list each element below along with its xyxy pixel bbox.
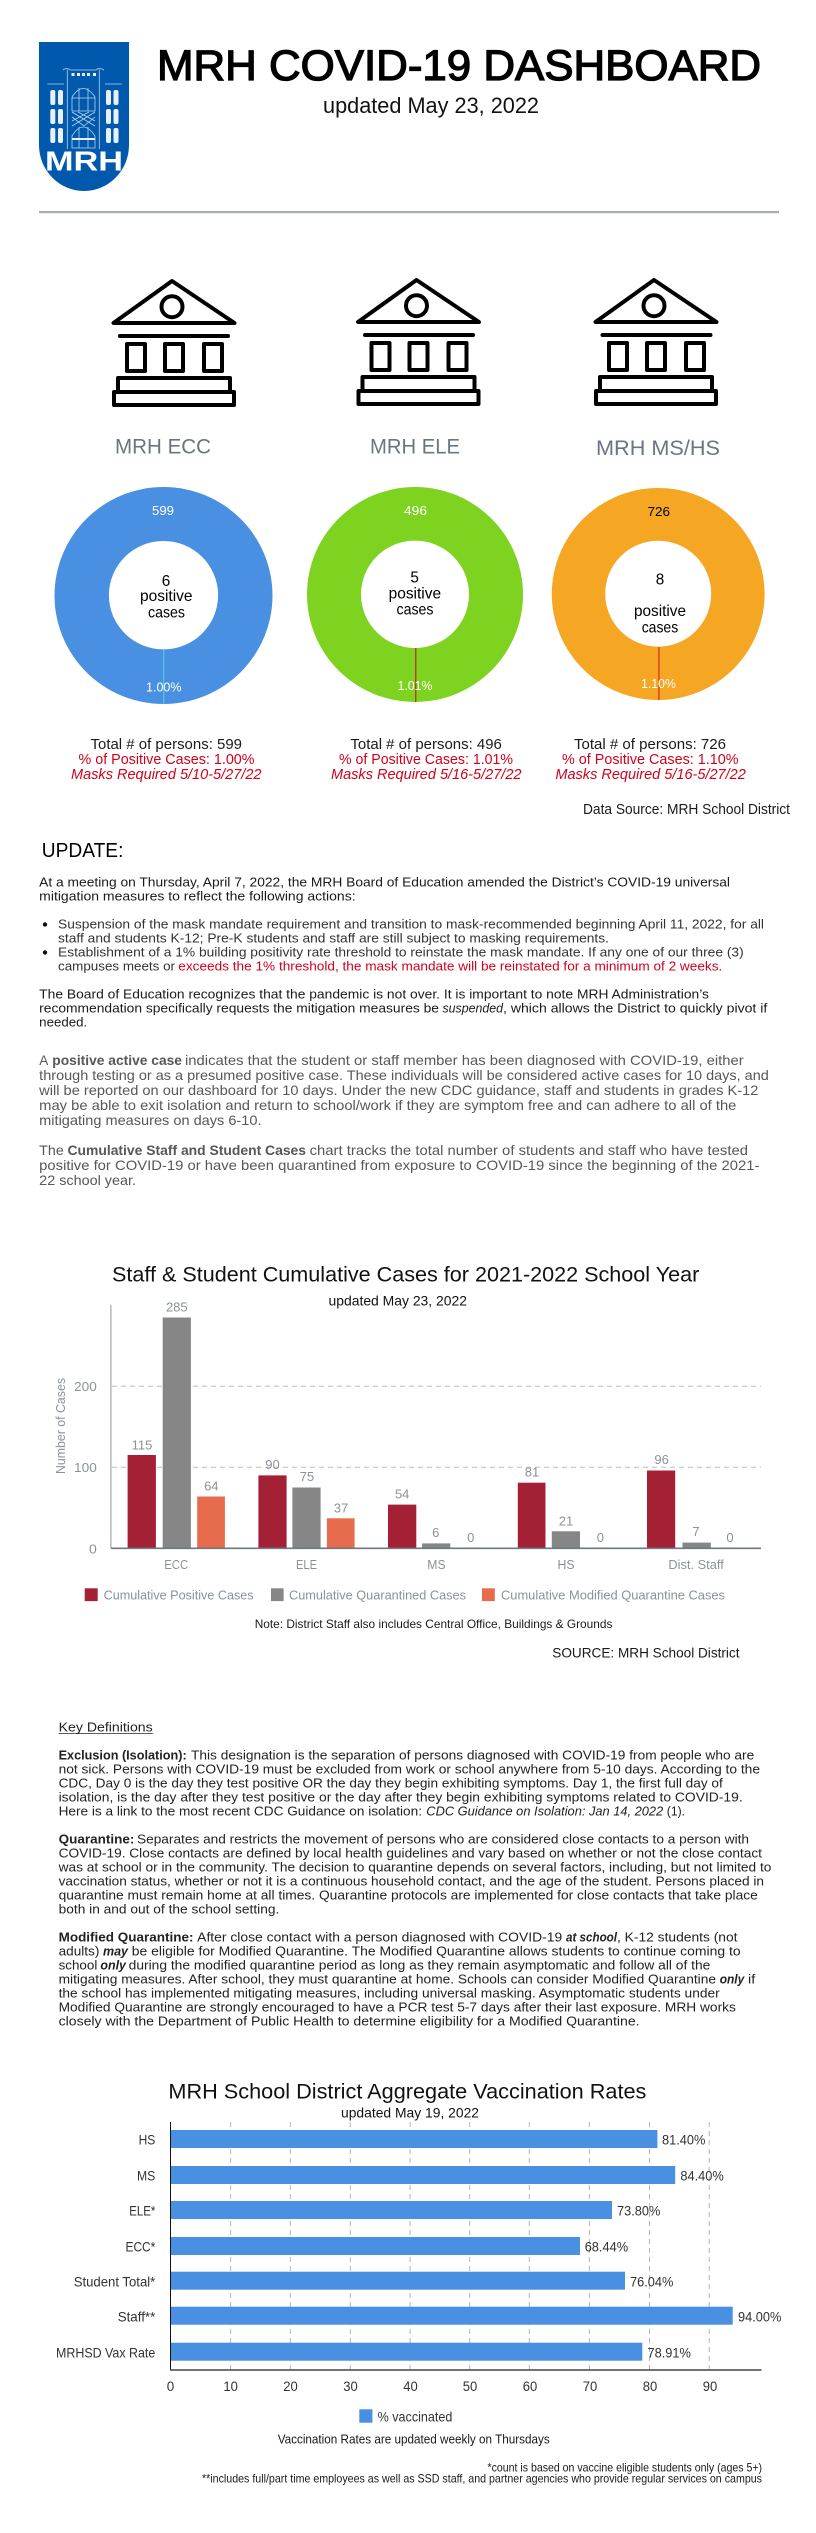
text block: positive active case: may be able to exit isolation and return to school/work if they are symptom free and can adhere to all of the (39, 1097, 737, 1113)
value labels (585, 2132, 781, 2361)
header (39, 42, 761, 191)
chart title: MRH School District Aggregate Vaccination Rates (168, 2080, 646, 2103)
x axis labels: 40 (403, 2378, 418, 2394)
icon: school building MS/HS (596, 280, 716, 404)
title: MRH COVID-19 DASHBOARD (157, 42, 761, 90)
donut chart: MS/HS: 1.10% (641, 676, 676, 691)
definition: modified quarantine (59, 1930, 756, 2029)
bar value labels: 7 (692, 1524, 700, 1539)
definition: modified quarantine: , K-12 students (not (617, 1930, 738, 1945)
subtitle date: updated May 23, 2022 (323, 93, 539, 118)
stats: ELE (331, 736, 522, 783)
source: SOURCE: MRH School District (552, 1645, 740, 1661)
y axis labels: 0 (89, 1542, 97, 1557)
definition: modified quarantine: closely with the Department of Public Health to determine eligibility for a Modified Quarantine. (59, 2014, 640, 2029)
x axis labels: 70 (583, 2378, 597, 2394)
bar value labels: 96 (654, 1452, 669, 1467)
bar value labels: 0 (597, 1530, 604, 1545)
heading: key definitions: Key Definitions (59, 1720, 153, 1735)
definition: modified quarantine: at school (566, 1930, 617, 1945)
text block: positive active case (38, 1052, 769, 1128)
donut chart: ECC: positive (140, 588, 193, 605)
definition: exclusion: isolation, is the day after they test positive or the day after they begin exhibiting symptoms related to COVID-19. (59, 1790, 743, 1805)
definition: exclusion (59, 1747, 760, 1819)
category labels: MS (137, 2168, 155, 2184)
x axis labels: 60 (523, 2378, 537, 2394)
definition: quarantine: both in and out of the school setting. (59, 1902, 279, 1917)
x axis labels: 10 (223, 2378, 238, 2394)
list: mitigation actions: staff and students K-12; Pre-K students and staff are still subject to masking requirements. (58, 931, 609, 946)
text block: cumulative cases explanation: chart tracks the total number of students and staff who have tested (310, 1142, 748, 1158)
text block: board meeting intro: At a meeting on Thursday, April 7, 2022, the MRH Board of Education amended the District’s COVID-19 universal (39, 875, 730, 890)
bar value labels: 64 (204, 1478, 219, 1493)
footnotes (202, 2461, 762, 2486)
list: mitigation actions: campuses meets or (58, 959, 176, 974)
donut chart: ELE: 1.01% (398, 678, 433, 693)
value labels: 94.00% (738, 2309, 781, 2325)
bar value labels: 0 (726, 1530, 734, 1545)
definition: modified quarantine: be eligible for Modified Quarantine. The Modified Quarantine allows students to continue coming to (132, 1944, 741, 1959)
definition: modified quarantine: mitigating measures. After school, they must quarantine at home. Schools can consider Modified Quarantine (59, 1972, 716, 1987)
bar chart: vaccination rates (56, 2080, 781, 2486)
definition: exclusion: (1). (667, 1804, 685, 1819)
legend (85, 1588, 725, 1603)
chart date: updated May 23, 2022 (328, 1293, 467, 1309)
panel: MRH ECC (54, 281, 272, 783)
stats: ECC: Total # of persons: 599 (90, 736, 242, 753)
bar value labels: 285 (166, 1299, 188, 1314)
donut chart: ELE: 496 (404, 503, 427, 518)
list: mitigation actions (43, 917, 764, 974)
label: MRH MS/HS: MRH MS/HS (596, 437, 720, 460)
bar value labels: 115 (132, 1437, 152, 1452)
value labels: 81.40% (662, 2132, 705, 2148)
definition: quarantine: vaccination status, whether or not it is a continuous household contact, and the age of the student. Persons placed in (59, 1874, 764, 1889)
definition: modified quarantine: only (720, 1972, 745, 1987)
definition: quarantine: Quarantine: (59, 1832, 134, 1847)
legend: % vaccinated (378, 2409, 452, 2425)
x axis labels: ELE (296, 1557, 317, 1572)
definition: modified quarantine: if (748, 1972, 756, 1987)
stats: MS/HS: Masks Required 5/16-5/27/22 (555, 766, 746, 783)
definition: modified quarantine: Modified Quarantine are strongly encouraged to have a PCR test 5-7 days after their last exposure. MRH works (59, 2000, 736, 2015)
text block: pandemic not over: The Board of Education recognizes that the pandemic is not over. It is important to note MRH Administration’s (39, 987, 710, 1002)
definition: quarantine: COVID-19. Close contacts are defined by local health guidelines and vary based on whether or not the close contact (59, 1846, 762, 1861)
donut chart: ELE: 5 (410, 570, 419, 587)
donut chart: ECC: 1.00% (146, 680, 182, 695)
x axis labels: 20 (283, 2378, 298, 2394)
definition: exclusion: not sick. Persons with COVID-19 must be excluded from work or school anywhere from 5-10 days. According to the (59, 1761, 760, 1776)
note: update schedule: Vaccination Rates are updated weekly on Thursdays (278, 2432, 550, 2447)
text block: cumulative cases explanation (39, 1142, 760, 1188)
text block: positive active case: indicates that the student or staff member has been diagnosed with COVID-19, either (185, 1052, 744, 1068)
heading: update: UPDATE: (42, 840, 123, 862)
bar value labels: 37 (334, 1500, 348, 1515)
x axis labels (164, 1557, 724, 1572)
stats: ECC: % of Positive Cases: 1.00% (78, 751, 254, 768)
text block: cumulative cases explanation: The (39, 1142, 64, 1158)
category labels: ELE* (129, 2203, 156, 2219)
text block: positive active case: positive active case (52, 1052, 182, 1068)
x axis labels: HS (558, 1557, 575, 1572)
stats: ECC: Masks Required 5/10-5/27/22 (71, 766, 262, 783)
donut chart: ECC (54, 487, 272, 704)
stats: ELE: Total # of persons: 496 (350, 736, 502, 753)
text block: cumulative cases explanation: positive for COVID-19 or have been quarantined from exposure to COVID-19 since the beginning of the 2021- (39, 1157, 760, 1173)
legend: Cumulative Modified Quarantine Cases (501, 1588, 725, 1603)
donut chart: MS/HS: positive (634, 603, 686, 620)
category labels: Student Total* (74, 2274, 156, 2290)
bars: MS (388, 1505, 450, 1548)
definition: exclusion: This designation is the separation of persons diagnosed with COVID-19 from people who are (191, 1747, 754, 1762)
donut chart: MS/HS: cases (642, 620, 678, 637)
category labels: Staff** (118, 2309, 156, 2325)
text block: board meeting intro: mitigation measures to reflect the following actions: (39, 889, 356, 904)
data source note: Data Source: MRH School District (583, 801, 791, 818)
value labels: 68.44% (585, 2239, 628, 2255)
x axis labels: MS (427, 1557, 446, 1572)
x axis labels: 50 (463, 2378, 477, 2394)
definition: exclusion: CDC, Day 0 is the day they test positive OR the day they begin exhibiting symptoms. Day 1, the first full day of (59, 1776, 723, 1790)
list: mitigation actions: Establishment of a 1% building positivity rate threshold to reinstate the mask mandate. If any one of our three (3) (58, 945, 744, 960)
value labels: 76.04% (630, 2274, 673, 2290)
text block: cumulative cases explanation: Cumulative Staff and Student Cases (68, 1142, 306, 1158)
logo: MRH shield: MRH (45, 146, 123, 177)
list: mitigation actions: exceeds the 1% threshold, the mask mandate will be reinstated for a minimum of 2 weeks. (178, 959, 722, 974)
y axis labels: 100 (74, 1460, 97, 1475)
icon: school building ECC (114, 281, 234, 405)
bars: ECC (128, 1318, 225, 1548)
update section (38, 840, 769, 1188)
bars: ELE (258, 1475, 355, 1548)
category labels: HS (139, 2132, 155, 2148)
x axis labels: ECC (164, 1557, 188, 1572)
x axis labels: 80 (643, 2378, 657, 2394)
x axis labels: Dist. Staff (668, 1557, 724, 1572)
bar value labels: 90 (265, 1457, 280, 1472)
footnotes: **includes full/part time employees as well as SSD staff, and partner agencies who provide regular services on campus (202, 2472, 762, 2486)
donut chart: ELE (307, 487, 523, 702)
bar value labels: 54 (395, 1486, 409, 1501)
chart title: Staff & Student Cumulative Cases for 2021-2022 School Year (112, 1264, 699, 1287)
bar value labels: 21 (559, 1513, 573, 1528)
logo: MRH shield (39, 42, 129, 191)
text block: positive active case: mitigating measures on days 6-10. (39, 1112, 262, 1128)
definition: modified quarantine: school (59, 1958, 97, 1973)
definition: exclusion: Here is a link to the most recent CDC Guidance on isolation: (59, 1804, 422, 1819)
chart date: updated May 19, 2022 (341, 2105, 479, 2121)
x axis labels: 30 (343, 2378, 358, 2394)
text block: pandemic not over: suspended (442, 1001, 504, 1016)
stats: ELE: % of Positive Cases: 1.01% (339, 751, 513, 768)
text block: cumulative cases explanation: 22 school year. (39, 1172, 136, 1188)
donut chart: ELE: positive (389, 585, 441, 602)
stats: MS/HS: % of Positive Cases: 1.10% (562, 751, 738, 768)
definition: modified quarantine: during the modified quarantine period as long as they remain asymptomatic and follow all of the (129, 1958, 710, 1973)
bar value labels: 81 (525, 1464, 539, 1479)
stats: ELE: Masks Required 5/16-5/27/22 (331, 766, 522, 783)
bar value labels: 75 (300, 1469, 314, 1484)
stats: MS/HS (555, 736, 746, 783)
text block: positive active case: A (39, 1052, 49, 1068)
text block: positive active case: will be reported on our dashboard for 10 days. Under the new CDC guidance, staff and students in grades K-12 (38, 1082, 759, 1098)
category labels (56, 2132, 156, 2361)
definition: modified quarantine: the school has implemented mitigating measures, including universal masking. Asymptomatic students under (59, 1986, 720, 2001)
definition: modified quarantine: only (100, 1958, 127, 1973)
category labels: MRHSD Vax Rate (56, 2345, 155, 2361)
donut chart: MS/HS: 726 (648, 504, 670, 519)
value labels: 73.80% (617, 2203, 660, 2219)
legend: Cumulative Positive Cases (104, 1588, 254, 1603)
bars: % vaccinated (170, 2130, 733, 2361)
legend: Cumulative Quarantined Cases (289, 1588, 466, 1603)
key definitions (58, 1720, 771, 2029)
definition: modified quarantine: may (103, 1944, 129, 1959)
icon: school building ELE (358, 280, 479, 404)
bar chart: cumulative cases (53, 1264, 761, 1661)
panel: MRH MS/HS (552, 280, 765, 783)
bars: HS (518, 1483, 580, 1548)
definition: quarantine: was at school or in the community. The decision to quarantine depends on several factors, including, but not limited to (58, 1860, 771, 1875)
donut chart: ECC: 6 (162, 573, 170, 590)
donut chart: MS/HS (552, 488, 765, 700)
definition: modified quarantine: adults) (59, 1944, 99, 1959)
donut chart: MS/HS: 8 (656, 572, 664, 589)
list: mitigation actions: Suspension of the mask mandate requirement and transition to mask-recommended beginning April 11, 2022, for all (58, 917, 764, 932)
donut chart: ECC: cases (148, 604, 185, 622)
y axis labels (74, 1379, 97, 1557)
donut chart: ELE: cases (396, 602, 434, 619)
text block: board meeting intro (39, 875, 730, 904)
y axis title: Number of Cases (53, 1378, 68, 1474)
text block: positive active case: through testing or as a presumed positive case. These individuals will be considered active cases for 10 days, and (39, 1067, 769, 1083)
note: Note: District Staff also includes Central Office, Buildings & Grounds (255, 1617, 612, 1631)
bar value labels: 6 (432, 1525, 439, 1540)
bar value labels: 0 (467, 1530, 474, 1545)
value labels: 84.40% (680, 2168, 724, 2184)
definition: exclusion: CDC Guidance on Isolation: Jan 14, 2022 (426, 1804, 664, 1819)
value labels: 78.91% (648, 2345, 691, 2361)
y axis labels: 200 (74, 1379, 97, 1394)
footnotes: *count is based on vaccine eligible students only (ages 5+) (488, 2461, 762, 2475)
text block: pandemic not over (39, 987, 768, 1030)
label: MRH ECC: MRH ECC (115, 436, 211, 458)
donut chart: ECC: 599 (152, 503, 174, 518)
bars: Dist. Staff (647, 1470, 711, 1548)
category labels: ECC* (126, 2239, 156, 2255)
text block: pandemic not over: , which allows the District to quickly pivot if (503, 1001, 768, 1016)
stats: ECC (71, 736, 262, 783)
x axis labels: 90 (703, 2378, 717, 2394)
panel: MRH ELE (307, 280, 523, 783)
x axis labels: 0 (167, 2378, 174, 2394)
label: MRH ELE: MRH ELE (370, 436, 460, 458)
text block: pandemic not over: recommendation specifically requests the mitigation measures be (39, 1001, 439, 1016)
definition: quarantine: Separates and restricts the movement of persons who are considered close contacts to a person with (137, 1832, 749, 1847)
definition: quarantine: quarantine must remain home at all times. Quarantine protocols are implemented for close contacts that take place (59, 1888, 758, 1903)
text block: pandemic not over: needed. (39, 1015, 87, 1030)
definition: modified quarantine: Modified Quarantine: (59, 1930, 193, 1945)
x axis labels (167, 2378, 717, 2394)
bar value labels (132, 1299, 734, 1545)
stats: MS/HS: Total # of persons: 726 (574, 736, 726, 753)
definition: quarantine (58, 1832, 771, 1917)
definition: exclusion: Exclusion (Isolation): (59, 1747, 187, 1762)
definition: modified quarantine: After close contact with a person diagnosed with COVID-19 (197, 1930, 562, 1945)
